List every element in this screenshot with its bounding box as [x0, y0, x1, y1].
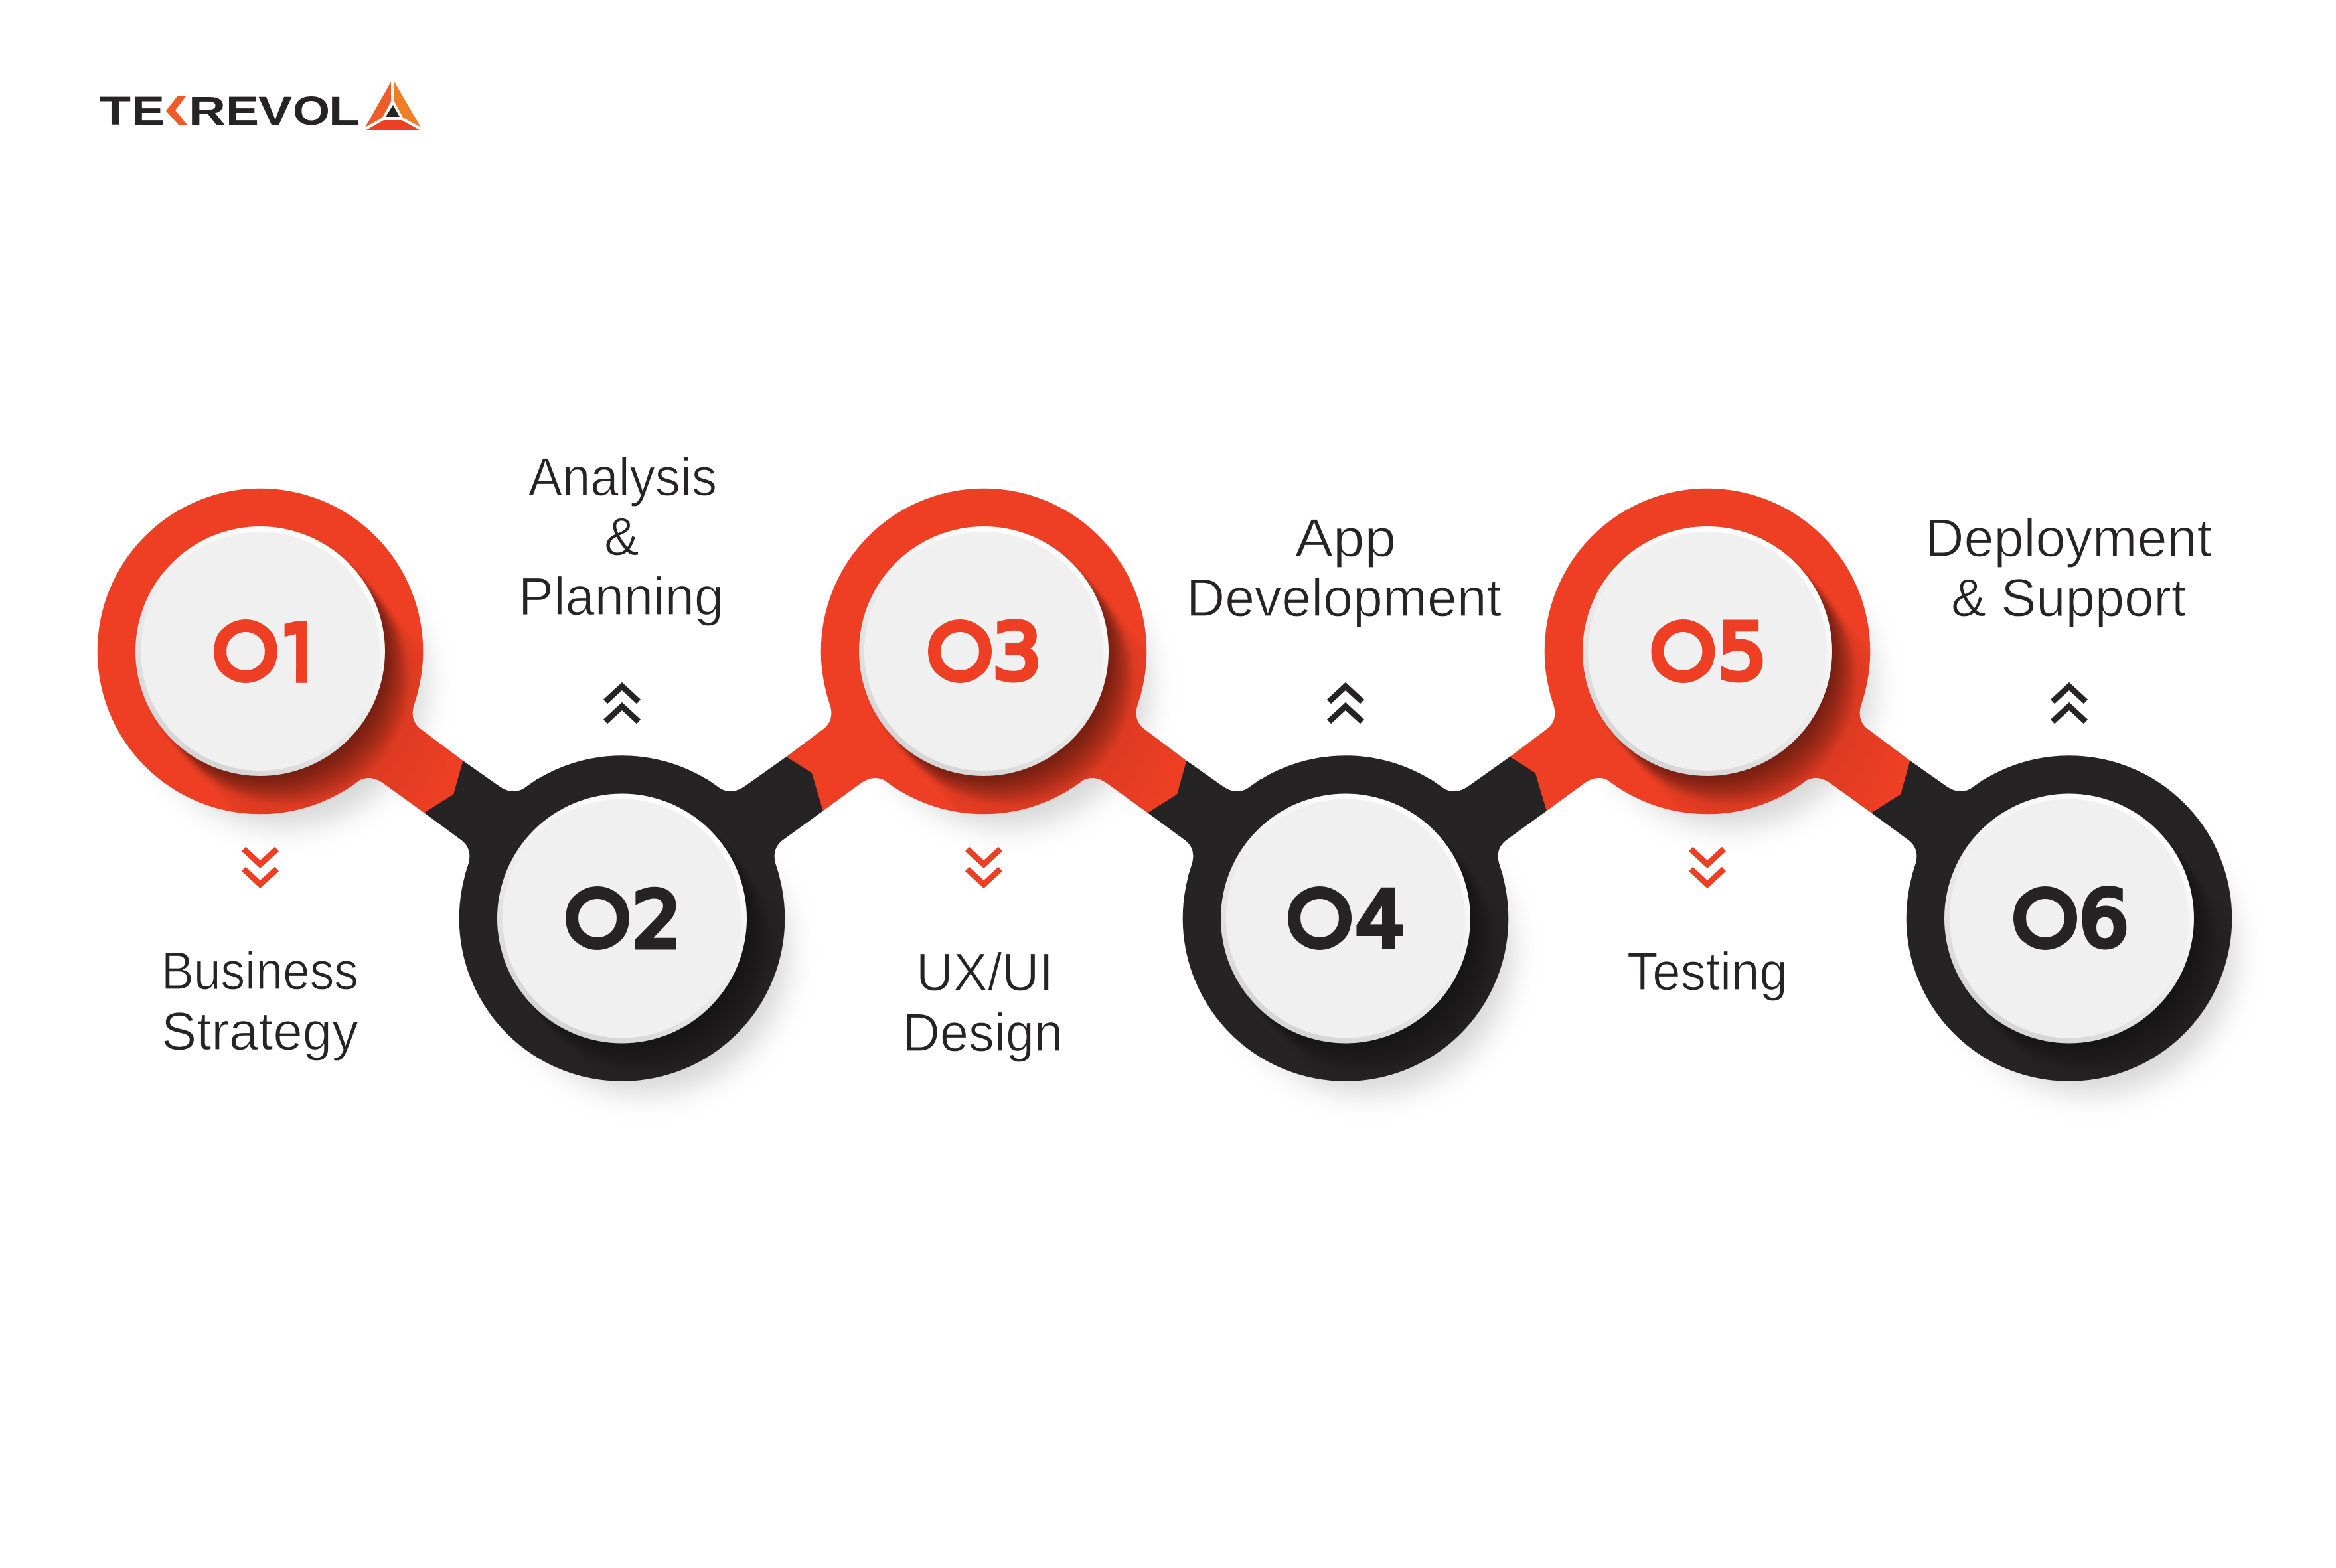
number 03: [920, 607, 1042, 698]
label: Business Strategy: [161, 941, 358, 1061]
soft ground shadows under circles: [141, 542, 2235, 1094]
step 05 node: red circle and connectors: [1510, 489, 1910, 814]
logo wordmark: E: [226, 88, 259, 133]
red circle body 03: [787, 489, 1186, 814]
disc 05: [1583, 526, 1832, 776]
label: Testing: Testing: [1627, 942, 1788, 1002]
number 05: [1643, 607, 1767, 698]
label: UX/UI Design: Design: [903, 1003, 1063, 1063]
label: App Development: App: [1295, 509, 1396, 568]
logo triangle mark: [365, 82, 421, 130]
label: UX/UI Design: UX/UI: [916, 943, 1053, 1002]
step 03 node: red circle and connectors: [786, 489, 1187, 814]
step 06 node: black circle and connector: [1871, 755, 2232, 1081]
icon: red double chevron down, step 05: [1691, 849, 1724, 884]
label: App Development: Development: [1186, 568, 1502, 628]
long shadow 06: [1990, 854, 2208, 1060]
number 01: [214, 619, 307, 683]
disc 02: [497, 794, 747, 1044]
label: Analysis & Planning: Planning: [518, 567, 724, 627]
icon: dark double chevron up, step 04: [1329, 686, 1362, 722]
long shadow 02: [543, 854, 761, 1060]
number 03: 3: [992, 607, 1042, 698]
number 06: 6: [2079, 874, 2129, 965]
label: Business Strategy: Business: [161, 941, 358, 1001]
icon: dark double chevron up, step 02: [605, 686, 639, 722]
number 04: [1280, 874, 1405, 965]
logo wordmark: O: [293, 88, 330, 133]
number 04: 0: [1280, 874, 1360, 965]
logo wordmark: V: [258, 88, 292, 133]
icon: red double chevron down, step 01: [244, 849, 277, 884]
label: Analysis & Planning: &: [604, 507, 639, 567]
black circle body 04: [1148, 755, 1547, 1081]
number 04: 4: [1356, 874, 1405, 965]
logo: TekRevol: [100, 82, 421, 133]
logo wordmark: L: [329, 88, 360, 133]
logo wordmark: R: [189, 88, 226, 133]
number 02: 0: [558, 874, 637, 965]
step 04 node: black circle and connectors: [1147, 755, 1547, 1081]
label: Deployment & Support: Deployment: [1925, 509, 2212, 568]
number 05: 5: [1717, 607, 1767, 698]
logo wordmark: E: [131, 88, 165, 133]
disc 03: [859, 526, 1109, 776]
label: Deployment & Support: & Support: [1951, 568, 2186, 628]
number 01: 1: [279, 608, 322, 699]
number 01: 0: [206, 607, 285, 698]
logo wordmark: T: [100, 88, 131, 133]
label: UX/UI Design: [903, 943, 1063, 1063]
label: Analysis & Planning: Analysis: [528, 447, 717, 507]
step 02 node: black circle and connectors: [424, 755, 823, 1081]
number 05: 0: [1643, 607, 1723, 698]
label: Business Strategy: Strategy: [161, 1002, 358, 1061]
number 02: 2: [632, 875, 682, 965]
red circle body 01: [98, 489, 463, 814]
disc 04: [1221, 794, 1470, 1044]
icon: red double chevron down, step 03: [967, 849, 1000, 884]
disc 01: [135, 526, 385, 776]
number 06: [2005, 874, 2129, 965]
black circle body 02: [424, 755, 823, 1081]
long shadow 03: [874, 553, 1154, 814]
step 01 node: red circle and connector: [97, 489, 463, 814]
logo wordmark: [100, 88, 360, 133]
label: Deployment & Support: [1925, 509, 2212, 628]
black circle body 06: [1871, 755, 2232, 1081]
label: Analysis & Planning: [518, 447, 724, 627]
label: App Development: [1186, 509, 1502, 628]
icon: dark double chevron up, step 06: [2053, 686, 2086, 722]
number 02: [558, 874, 682, 965]
long shadow 01: [151, 554, 430, 814]
red circle body 05: [1510, 489, 1910, 814]
number 03: 0: [920, 607, 1000, 698]
disc 06: [1944, 794, 2194, 1044]
long shadow 04: [1267, 854, 1484, 1060]
long shadow 05: [1598, 553, 1877, 814]
number 06: 0: [2005, 874, 2085, 965]
